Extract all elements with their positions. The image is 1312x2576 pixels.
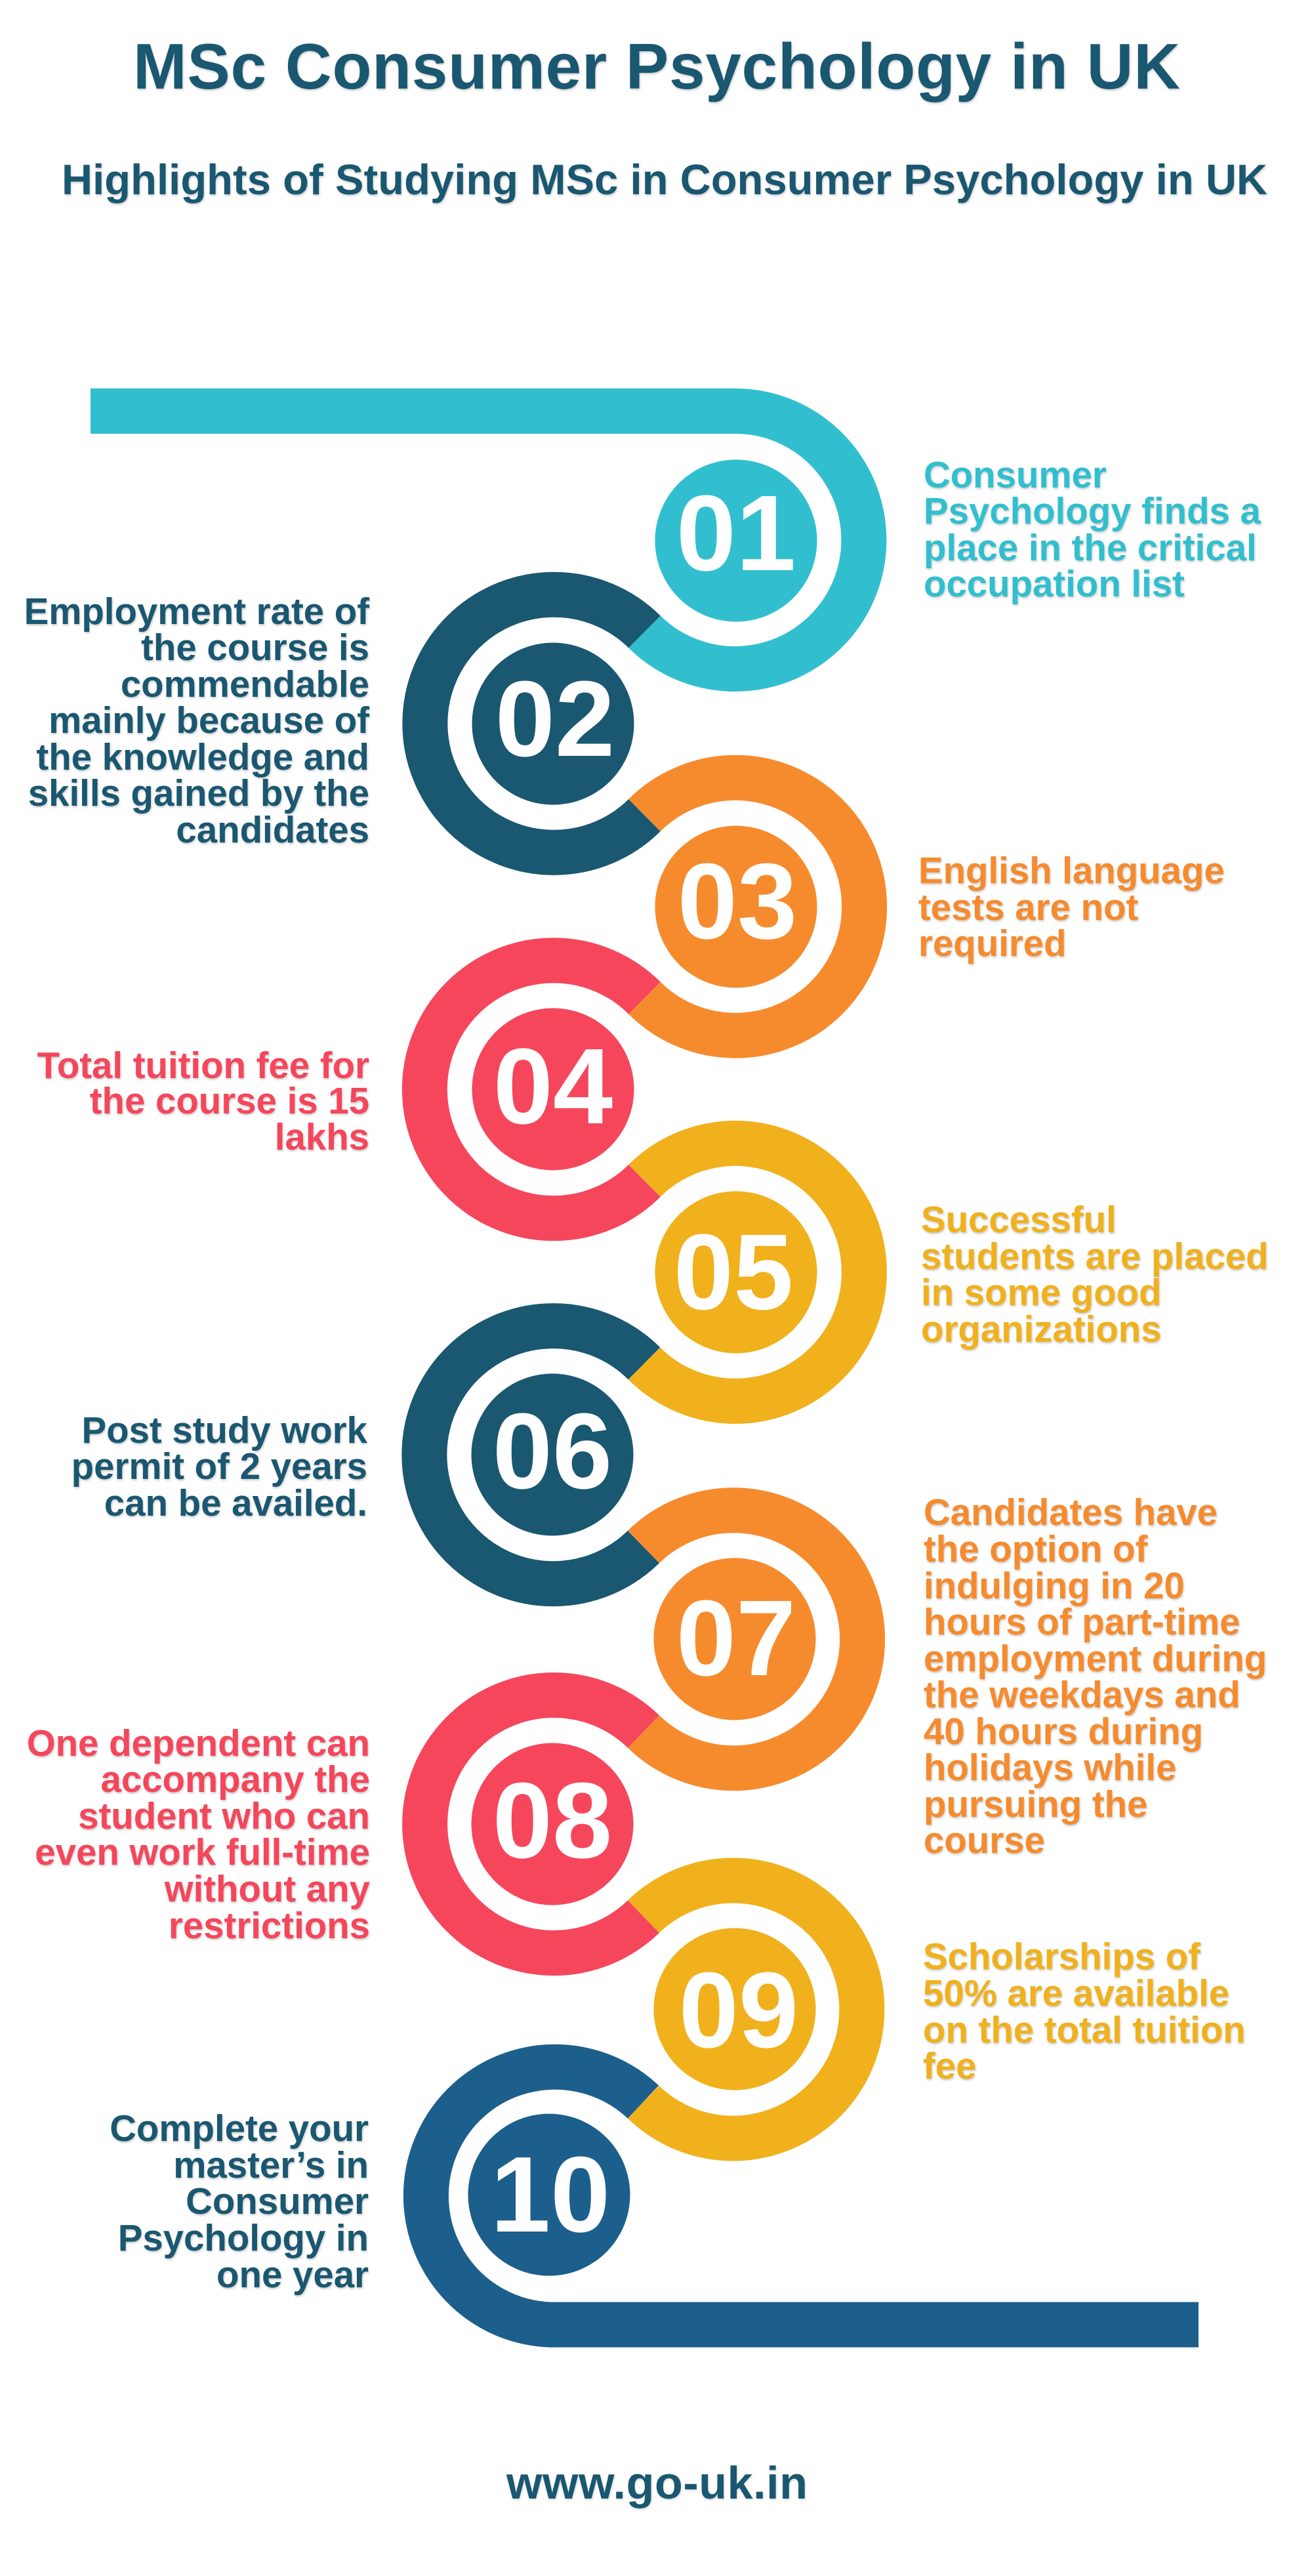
number disc 04 (472, 1008, 634, 1171)
step 08 (27, 1695, 644, 1953)
text 02: candidates (176, 809, 369, 850)
number disc 07 (653, 1558, 816, 1720)
text 02: skills gained by the (28, 772, 369, 814)
step 01 (91, 411, 1261, 669)
text 05: students are placed (921, 1236, 1269, 1277)
number 01: 01 (676, 473, 796, 593)
text 01: place in the critical (924, 527, 1257, 568)
website url: www.go-uk.in (506, 2457, 808, 2508)
number 04: 04 (493, 1026, 613, 1146)
text 07: the weekdays and (924, 1674, 1240, 1715)
number 05: 05 (674, 1212, 793, 1332)
number 07: 07 (676, 1578, 796, 1698)
title: MSc Consumer Psychology in UK (133, 30, 1180, 102)
text 02: commendable (121, 663, 369, 705)
ring 02 (425, 594, 644, 852)
text 03: tests are not (918, 886, 1139, 928)
text 03: required (918, 923, 1067, 964)
ring 05 (644, 1143, 864, 1401)
text 01: Consumer (924, 454, 1107, 495)
text 05: Successful (921, 1199, 1117, 1240)
ring 03 (644, 778, 865, 1035)
text 06: can be availed. (104, 1482, 367, 1524)
number disc 09 (653, 1928, 816, 2090)
text 05: organizations (921, 1308, 1162, 1350)
number disc 02 (472, 643, 634, 804)
number disc 05 (655, 1192, 817, 1353)
text 01: occupation list (924, 563, 1185, 604)
number 09: 09 (679, 1950, 798, 2070)
ring 09 (643, 1880, 862, 2138)
step 05 (644, 1143, 1269, 1401)
text 10: Psychology in (118, 2217, 369, 2258)
text 05: in some good (921, 1272, 1162, 1313)
text 09: fee (923, 2045, 977, 2087)
text 07: hours of part-time (924, 1601, 1240, 1642)
step 04 (37, 961, 644, 1218)
ring 07 (644, 1510, 863, 1768)
step 10 (110, 2067, 1199, 2325)
step 07 (644, 1491, 1267, 1861)
text 06: permit of 2 years (72, 1445, 367, 1487)
text 09: on the total tuition (923, 2009, 1246, 2050)
step 02 (24, 591, 644, 852)
text 02: Employment rate of (24, 591, 369, 632)
text 07: course (924, 1819, 1045, 1861)
text 07: indulging in 20 (924, 1565, 1185, 1606)
text 08: student who can (78, 1795, 370, 1837)
text 10: master’s in (173, 2144, 369, 2186)
text 07: pursuing the (924, 1783, 1147, 1825)
number disc 06 (471, 1374, 634, 1535)
text 04: the course is 15 (90, 1080, 369, 1121)
number 02: 02 (495, 659, 615, 779)
text 09: 50% are available (923, 1972, 1229, 2014)
text 01: Psychology finds a (924, 490, 1261, 531)
text 07: the option of (924, 1528, 1148, 1569)
ring 04 (424, 961, 644, 1218)
text 04: Total tuition fee for (37, 1045, 369, 1086)
step 03 (644, 778, 1225, 1035)
text 08: even work full-time (35, 1831, 370, 1873)
number 10: 10 (491, 2134, 610, 2254)
number 08: 08 (493, 1760, 612, 1880)
text 08: accompany the (100, 1758, 370, 1800)
step 09 (643, 1880, 1246, 2138)
step 06 (72, 1326, 644, 1584)
number disc 03 (655, 825, 817, 988)
subtitle: Highlights of Studying MSc in Consumer Psychology in UK (62, 156, 1267, 203)
text 10: Consumer (186, 2180, 369, 2222)
text 08: One dependent can (27, 1722, 370, 1764)
text 07: employment during (924, 1638, 1267, 1679)
text 02: the knowledge and (36, 736, 369, 778)
number disc 08 (471, 1743, 634, 1905)
ring 08 (425, 1695, 644, 1953)
text 07: 40 hours during (924, 1711, 1203, 1752)
text 09: Scholarships of (923, 1936, 1200, 1977)
text 02: mainly because of (49, 699, 369, 741)
number disc 01 (655, 459, 817, 622)
ribbon: blue ring and bar (426, 2067, 1199, 2325)
text 03: English language (918, 850, 1225, 891)
ribbon: teal bar and ring (91, 411, 864, 669)
number disc 10 (468, 2114, 630, 2275)
ring 06 (424, 1326, 644, 1584)
number 06: 06 (493, 1391, 612, 1511)
text 07: holidays while (924, 1747, 1176, 1788)
text 08: without any (164, 1868, 371, 1909)
text 07: Candidates have (924, 1491, 1218, 1533)
text 02: the course is (141, 627, 369, 668)
text 06: Post study work (81, 1409, 368, 1451)
text 10: one year (216, 2254, 369, 2295)
text 08: restrictions (169, 1905, 370, 1946)
text 10: Complete your (110, 2108, 369, 2149)
text 04: lakhs (275, 1116, 369, 1157)
number 03: 03 (678, 841, 797, 961)
